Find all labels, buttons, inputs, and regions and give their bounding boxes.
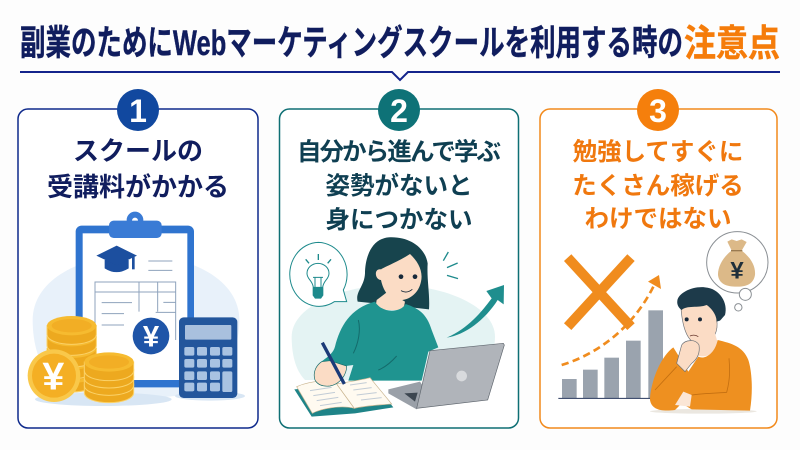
bar chart (562, 310, 663, 398)
illustration: clipboard, coins and calculator (28, 212, 245, 406)
illustration: woman studying with laptop (290, 237, 504, 417)
laptop (388, 343, 504, 409)
heading 1 (47, 136, 229, 202)
heading 3: わけではない (584, 206, 732, 233)
heading 1: 受講料がかかる (47, 172, 229, 202)
badge 1 (117, 89, 159, 131)
heading 3 (572, 138, 744, 233)
badge 3: 3 (649, 93, 667, 129)
thought bubble with money bag (707, 232, 768, 311)
card frame 2 (280, 109, 518, 428)
thought bubble with money bag: ¥ (730, 257, 744, 284)
title: 注意点 (684, 23, 780, 64)
illustration: clipboard, coins and calculator: ¥ (42, 354, 64, 398)
heading 1: スクールの (73, 136, 203, 166)
speech bubble with bulb (290, 242, 347, 306)
card frame 3 (540, 109, 777, 428)
illustration: clipboard, coins and calculator: ¥ (143, 321, 160, 354)
title divider with pointer (20, 72, 780, 80)
illustration: thinking man, bar chart and cross (558, 232, 768, 414)
heading 2: 身につかない (326, 206, 472, 234)
panel: school fees (18, 89, 258, 428)
heading 2 (297, 138, 501, 234)
heading 2: 自分から進んで学ぶ (297, 138, 501, 166)
heading 3: たくさん稼げる (572, 172, 744, 200)
panel: self-motivation (280, 89, 518, 428)
cross (568, 258, 631, 327)
badge 2: 2 (390, 93, 408, 129)
heading 2: 姿勢がないと (326, 171, 472, 200)
man (650, 287, 757, 414)
panel: no quick earnings (540, 89, 777, 428)
badge 1: 1 (129, 93, 147, 129)
book (294, 378, 393, 417)
dashed growth arrow (562, 287, 653, 365)
card frame 1 (18, 109, 258, 428)
heading 3: 勉強してすぐに (573, 138, 743, 166)
badge 2 (378, 89, 420, 131)
badge 3 (637, 89, 679, 131)
